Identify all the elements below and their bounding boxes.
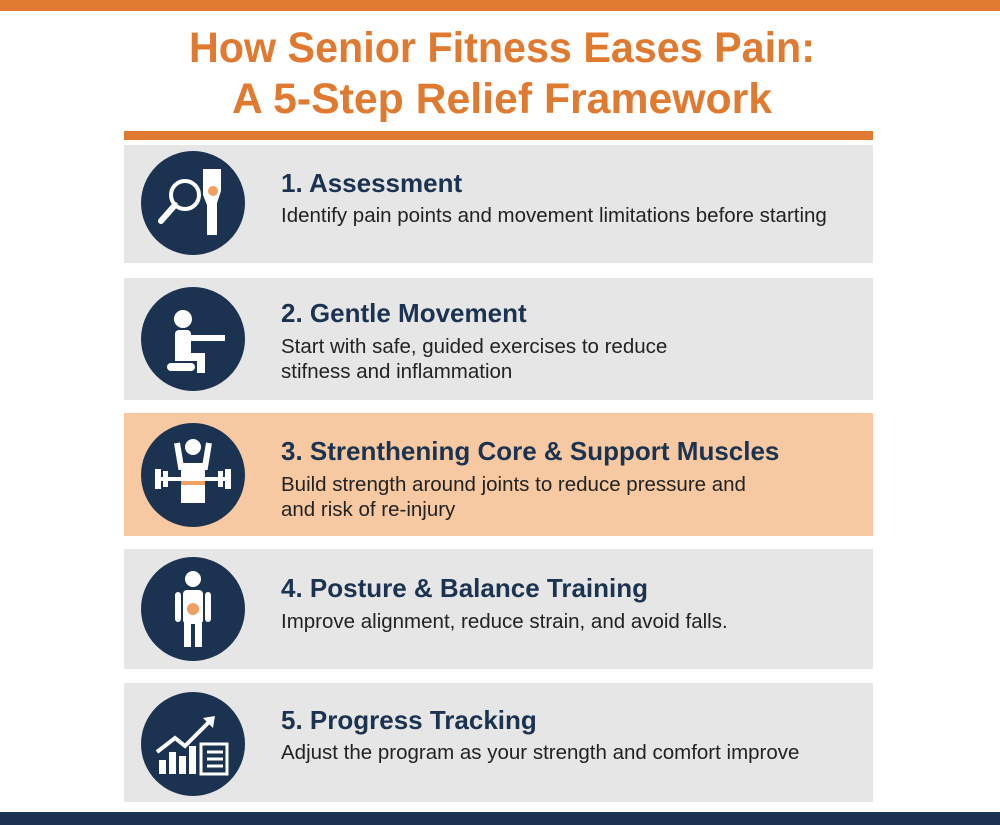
- icon: magnifier and knee: [141, 151, 245, 255]
- icon: progress chart: [141, 692, 245, 796]
- body text: Identify pain points and movement limitations before starting: [281, 204, 827, 227]
- title: A 5-Step Relief Framework: [232, 75, 772, 123]
- panel: step 5: [124, 683, 873, 802]
- heading: 3. Strenthening Core & Support Muscles: [281, 436, 779, 466]
- title: [189, 24, 815, 123]
- heading: 5. Progress Tracking: [281, 705, 537, 735]
- panel: step 2: [124, 278, 873, 400]
- bottom navy bar: [0, 812, 1000, 825]
- icon: standing figure: [141, 557, 245, 661]
- top orange bar: [0, 0, 1000, 11]
- icon: dumbbell figure: [141, 423, 245, 527]
- body text: Build strength around joints to reduce pressure and: [281, 473, 746, 496]
- panel: step 4: [124, 549, 873, 669]
- title: How Senior Fitness Eases Pain:: [189, 24, 815, 72]
- body text: [281, 335, 667, 383]
- body text: Start with safe, guided exercises to reduce: [281, 335, 667, 358]
- body text: [281, 473, 746, 521]
- heading: 4. Posture & Balance Training: [281, 573, 648, 603]
- body text: Improve alignment, reduce strain, and avoid falls.: [281, 610, 728, 633]
- body text: stifness and inflammation: [281, 360, 512, 383]
- heading: 1. Assessment: [281, 168, 462, 198]
- heading: 2. Gentle Movement: [281, 298, 527, 328]
- icon: seated senior: [141, 287, 245, 391]
- body text: and risk of re-injury: [281, 498, 455, 521]
- panel: step 1: [124, 145, 873, 263]
- panel: step 3 highlighted: [124, 413, 873, 536]
- body text: Adjust the program as your strength and comfort improve: [281, 741, 799, 764]
- orange rule: [124, 131, 873, 140]
